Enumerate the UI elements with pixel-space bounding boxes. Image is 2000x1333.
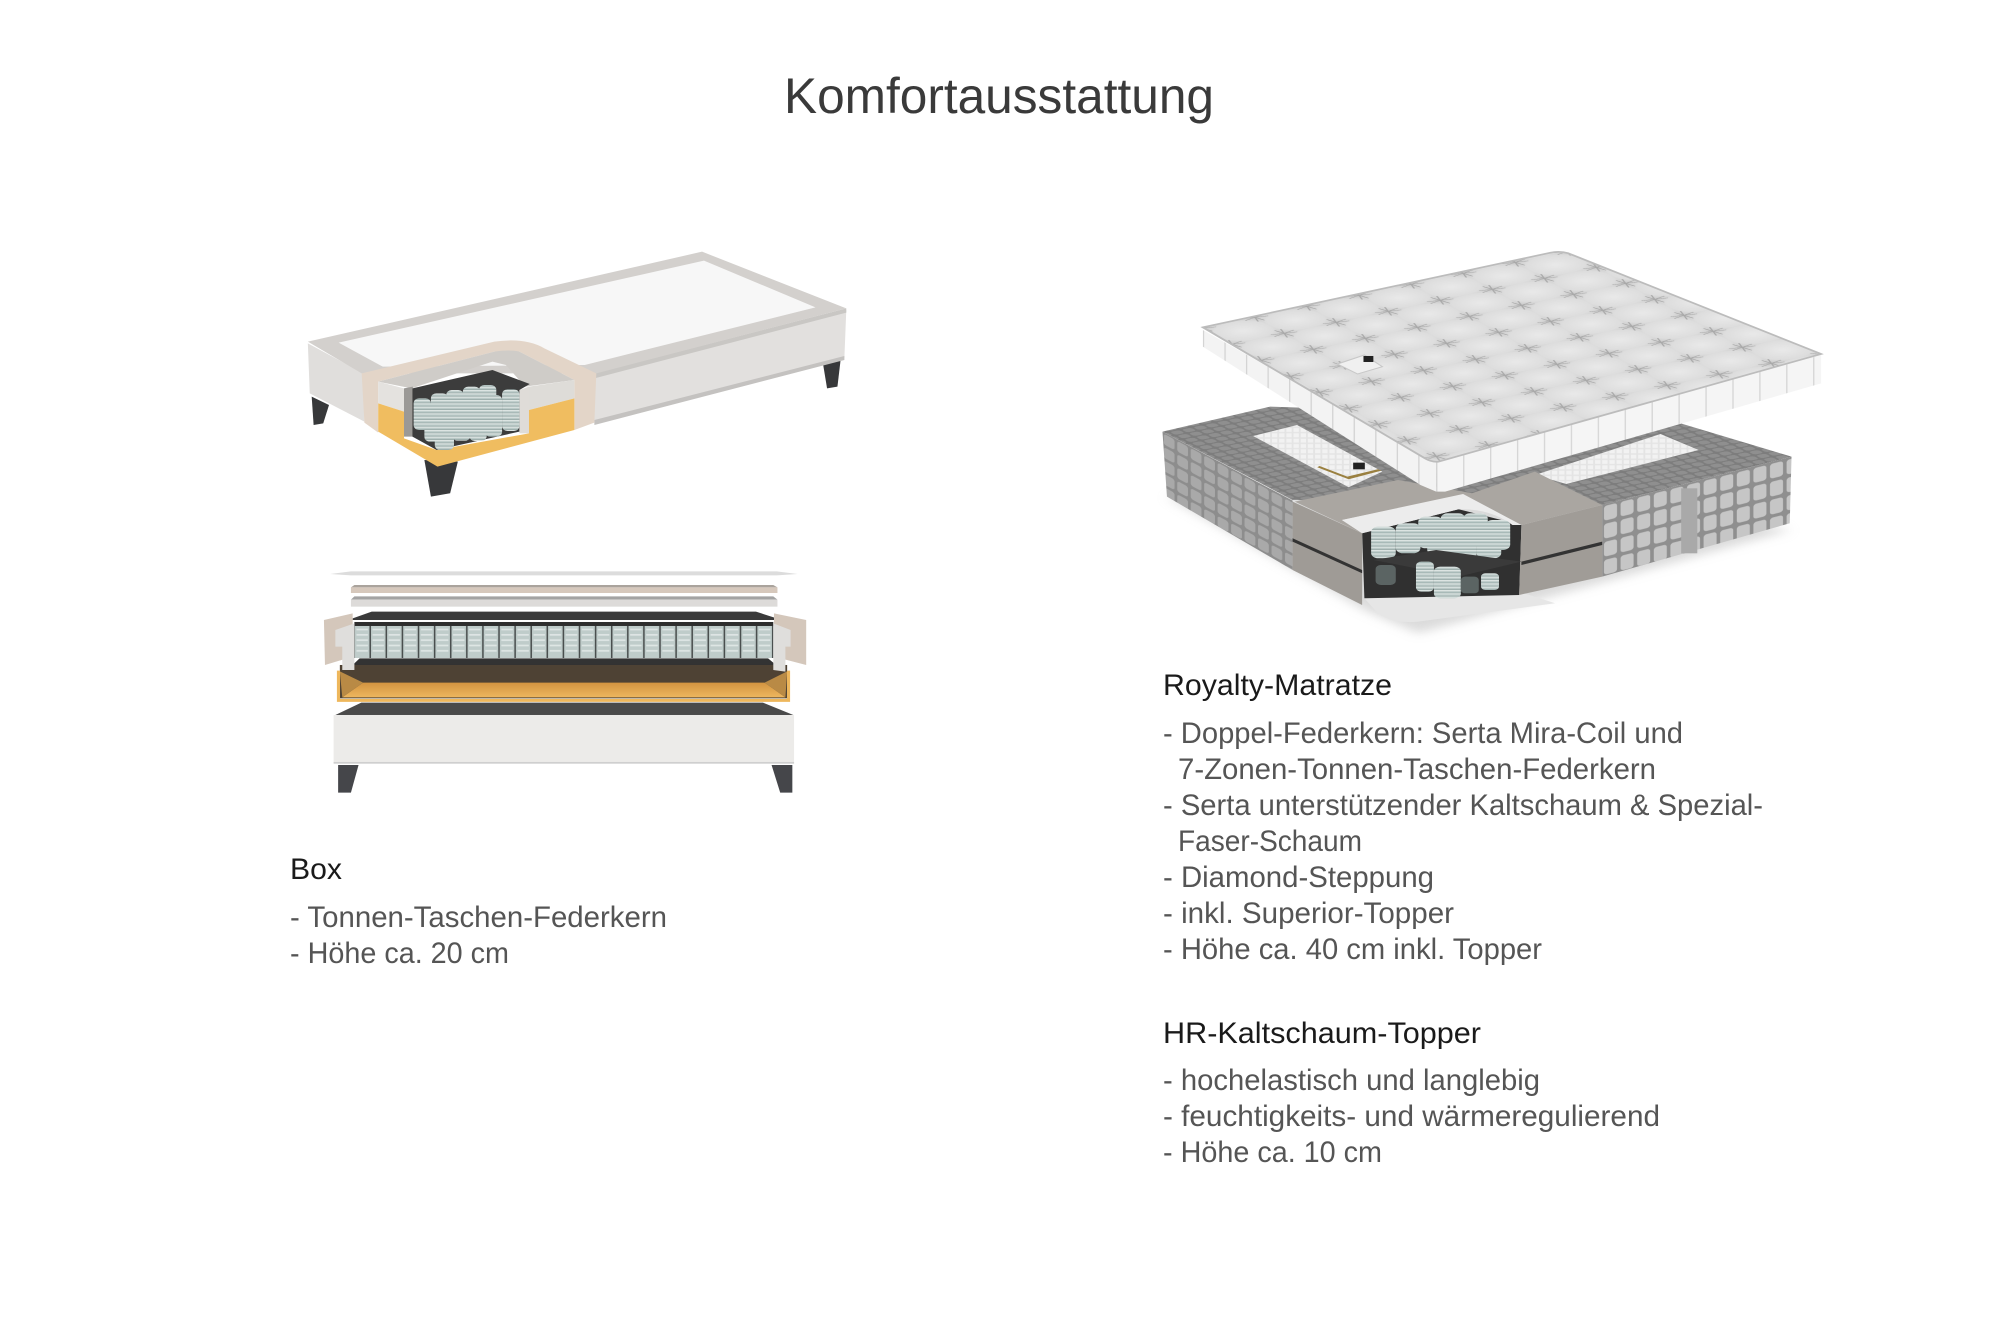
- yellow wooden frame: [378, 398, 574, 467]
- double springs: [1371, 513, 1521, 598]
- grey foam layer: [351, 596, 777, 607]
- dark interior: [412, 370, 530, 450]
- beige foam cut: [362, 340, 596, 433]
- box spring lower unit: [1162, 407, 1792, 577]
- box top frame and white surface: [308, 252, 846, 373]
- side foam pieces: [324, 613, 806, 665]
- box base: [334, 703, 794, 764]
- text: topper features: - feuchtigkeits- und wärmeregulierend: [1163, 1100, 1660, 1133]
- illustration: box cutaway: [308, 252, 846, 497]
- cutaway foam: [1293, 472, 1602, 622]
- text: mattress features: - Höhe ca. 40 cm inkl. Topper: [1163, 933, 1542, 966]
- illustration: boxspring and mattress: [1162, 252, 1821, 633]
- text: box features: [290, 901, 667, 970]
- text: mattress features: 7-Zonen-Tonnen-Taschen-Federkern: [1178, 753, 1656, 786]
- grey foam side pieces: [335, 623, 791, 672]
- dark fleece layer: [353, 612, 777, 620]
- pocket springs: [414, 385, 519, 450]
- soft shadow: [1167, 497, 1791, 633]
- legs: [338, 765, 792, 793]
- heading: topper: HR-Kaltschaum-Topper: [1163, 1017, 1481, 1050]
- text: mattress features: - Doppel-Federkern: Serta Mira-Coil und: [1163, 717, 1683, 750]
- heading: mattress: Royalty-Matratze: [1163, 669, 1392, 702]
- legs of the box: [312, 361, 841, 497]
- illustration: box exploded view: [324, 571, 806, 793]
- grey foam cut: [378, 350, 574, 437]
- beige foam layer: [351, 585, 777, 593]
- text: box features: - Höhe ca. 20 cm: [290, 937, 509, 970]
- text: mattress features: - Diamond-Steppung: [1163, 861, 1434, 894]
- text: mattress features: - inkl. Superior-Topper: [1163, 897, 1454, 930]
- box upholstered sides: [308, 308, 846, 425]
- heading: box: Box: [290, 853, 342, 886]
- panel: mattress: [1162, 252, 1821, 1169]
- yellow wooden frame: [338, 665, 789, 700]
- mattress: [1203, 252, 1821, 492]
- text: topper features: - hochelastisch und langlebig: [1163, 1064, 1540, 1097]
- panel: box: [290, 252, 846, 970]
- text: box features: - Tonnen-Taschen-Federkern: [290, 901, 667, 934]
- text: topper features: [1163, 1064, 1660, 1169]
- title: Komfortausstattung: [784, 68, 1214, 124]
- text: mattress features: [1163, 717, 1763, 966]
- text: mattress features: - Serta unterstützender Kaltschaum & Spezial-: [1163, 789, 1763, 822]
- text: topper features: - Höhe ca. 10 cm: [1163, 1136, 1382, 1169]
- spring unit: [353, 622, 776, 665]
- text: mattress features: Faser-Schaum: [1178, 825, 1362, 858]
- top sheet: [330, 571, 798, 575]
